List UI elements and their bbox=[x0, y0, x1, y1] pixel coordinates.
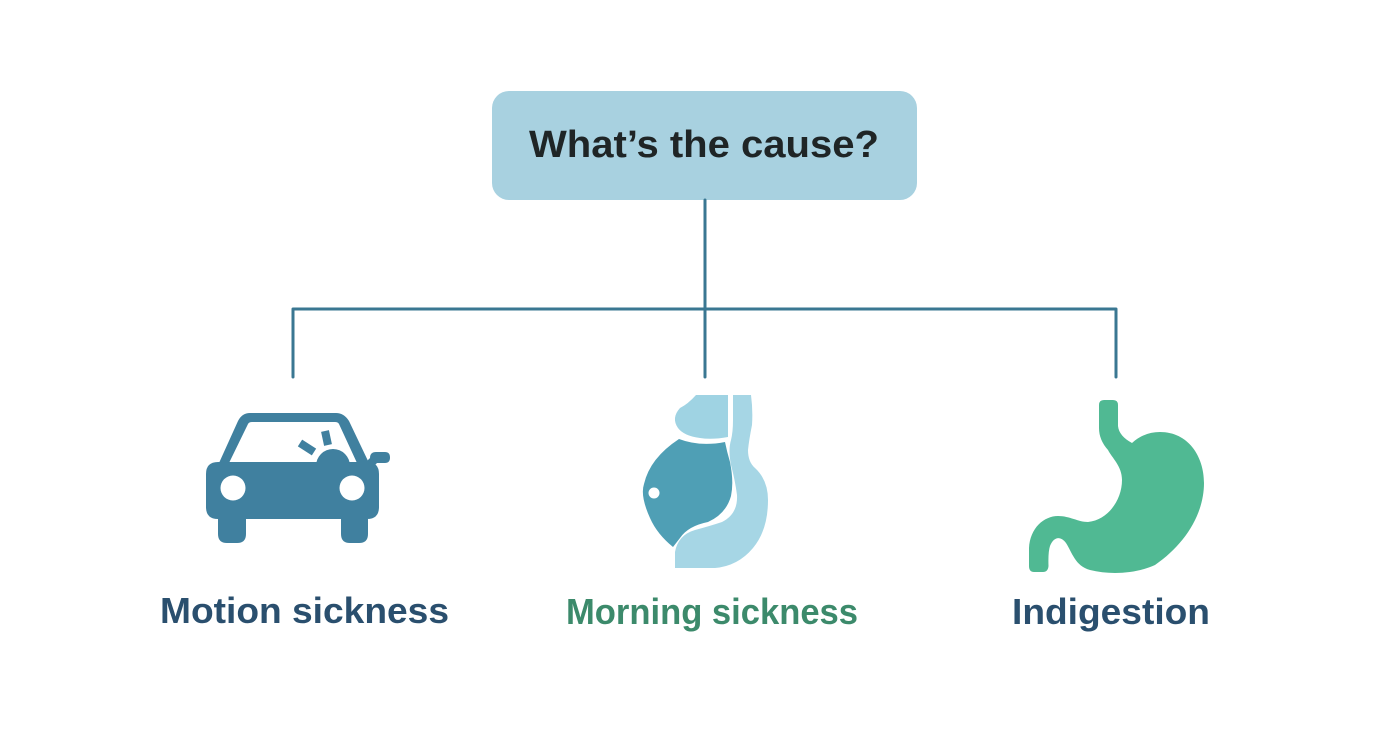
icon: car bbox=[206, 413, 390, 543]
connector lines bbox=[293, 200, 1116, 377]
heading text: What’s the cause? bbox=[529, 124, 879, 166]
heading box bbox=[492, 91, 917, 200]
label: indigestion: Indigestion bbox=[1012, 591, 1210, 632]
icon: stomach bbox=[1029, 400, 1204, 573]
label: morning sickness: Morning sickness bbox=[566, 591, 858, 632]
label: motion sickness: Motion sickness bbox=[160, 590, 449, 631]
icon: pregnant figure bbox=[643, 395, 768, 568]
